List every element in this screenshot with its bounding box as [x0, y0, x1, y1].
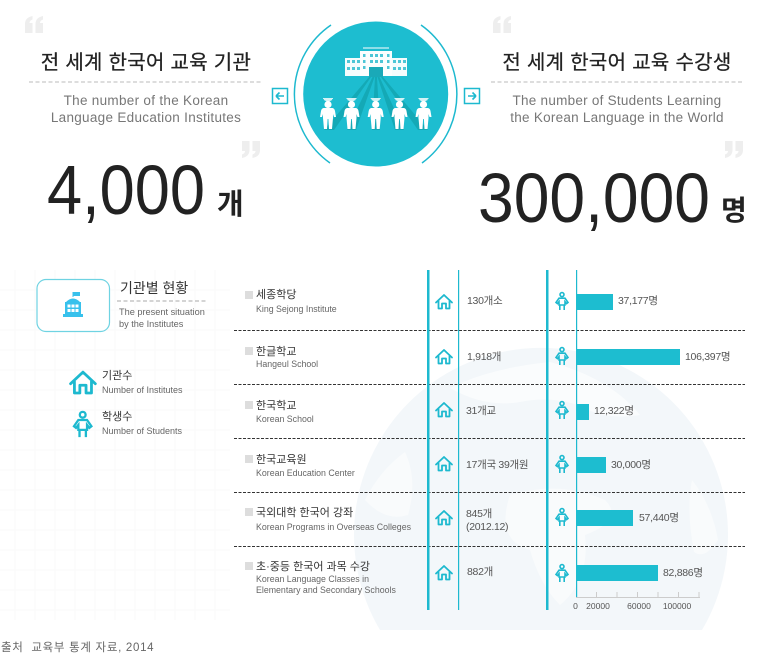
school building	[345, 48, 407, 77]
left subtitle: The number of the Korean	[64, 93, 228, 108]
row: King Sejong Institute: 세종학당	[256, 288, 296, 301]
legend: students: Number of Students	[102, 426, 183, 436]
row: Korean Programs in Overseas Colleges: (2012.12)	[466, 521, 508, 533]
row: King Sejong Institute: 130개소	[467, 295, 503, 307]
row: Korean Language Classes in Schools: Korean Language Classes in	[256, 574, 369, 584]
row: Korean Education Center: 30,000명	[611, 459, 651, 471]
row: Korean Programs in Overseas Colleges: Korean Programs in Overseas Colleges	[256, 522, 412, 532]
bar chart axis: 60000	[627, 601, 651, 611]
source note: 출처 교육부 통계 자료, 2014	[1, 641, 154, 654]
row: Korean School: 12,322명	[594, 405, 634, 417]
left header quote marks	[25, 16, 260, 158]
graduates	[320, 98, 432, 129]
row: Korean Programs in Overseas Colleges	[245, 506, 679, 533]
center arrow right	[464, 88, 480, 104]
right header quote marks	[493, 16, 743, 158]
row: Korean Education Center: 17개국 39개원	[466, 459, 528, 471]
center illustration: school and graduates	[294, 22, 457, 166]
left number: 4,000 institutes: 4,000	[47, 151, 205, 229]
row: Korean Language Classes in Schools: Elementary and Secondary Schools	[256, 585, 396, 595]
legend: institutes: Number of Institutes	[102, 385, 183, 395]
row: Hangeul School	[245, 345, 730, 369]
row: Korean Language Classes in Schools	[245, 560, 703, 595]
row: Korean Language Classes in Schools: 82,886명	[663, 567, 703, 579]
legend: students: 학생수	[102, 410, 132, 423]
row: Korean School: 한국학교	[256, 399, 296, 412]
row: Korean Programs in Overseas Colleges: 845개	[466, 508, 492, 520]
row: Korean Education Center: Korean Education Center	[256, 468, 355, 478]
row: Korean Education Center	[245, 453, 651, 478]
legend: institutes: 기관수	[102, 369, 132, 382]
row: Hangeul School: 한글학교	[256, 345, 296, 358]
legend: institutes	[71, 369, 183, 395]
panel: present situation heading	[37, 280, 207, 332]
row: King Sejong Institute: King Sejong Institute	[256, 304, 337, 314]
row: Korean School: Korean School	[256, 414, 314, 424]
panel: present situation heading: The present situation	[119, 307, 205, 317]
bar chart axis	[573, 592, 700, 611]
row separators	[234, 330, 745, 546]
icon: institute building	[63, 292, 83, 317]
globe background	[354, 348, 728, 630]
center arrow left	[272, 88, 288, 104]
left subtitle: Language Education Institutes	[51, 110, 241, 125]
bar chart axis: 20000	[586, 601, 610, 611]
row: Hangeul School: Hangeul School	[256, 359, 318, 369]
right title: 전 세계 한국어 교육 수강생	[502, 51, 732, 74]
row: Korean Programs in Overseas Colleges: 국외대학 한국어 강좌	[256, 506, 353, 519]
row: Korean School: 31개교	[466, 405, 496, 417]
panel: present situation heading: 기관별 현황	[120, 280, 188, 296]
legend: students	[74, 410, 183, 437]
right subtitle: the Korean Language in the World	[510, 110, 724, 125]
row: Korean Programs in Overseas Colleges: 57,440명	[639, 512, 679, 524]
row: Korean School	[245, 399, 634, 424]
light rays	[324, 77, 428, 130]
right subtitle: The number of Students Learning	[513, 93, 721, 108]
row: King Sejong Institute: 37,177명	[618, 295, 658, 307]
left number: 4,000 institutes: 개	[217, 188, 244, 221]
bar chart axis: 100000	[663, 601, 691, 611]
row: Korean Language Classes in Schools: 882개	[467, 566, 493, 578]
right number: 300,000 students: 300,000	[478, 159, 710, 237]
left title: 전 세계 한국어 교육 기관	[41, 51, 251, 74]
row: Hangeul School: 1,918개	[467, 351, 501, 363]
right number: 300,000 students: 명	[721, 195, 747, 226]
row: King Sejong Institute	[245, 288, 658, 314]
bar chart axis: 0	[573, 601, 578, 611]
row: Korean Language Classes in Schools: 초·중등 한국어 과목 수강	[256, 560, 370, 573]
row: Hangeul School: 106,397명	[685, 351, 730, 363]
panel: present situation heading: by the Institutes	[119, 319, 184, 329]
row: Korean Education Center: 한국교육원	[256, 453, 307, 466]
table vertical rules	[427, 270, 577, 610]
background grid	[0, 270, 230, 620]
